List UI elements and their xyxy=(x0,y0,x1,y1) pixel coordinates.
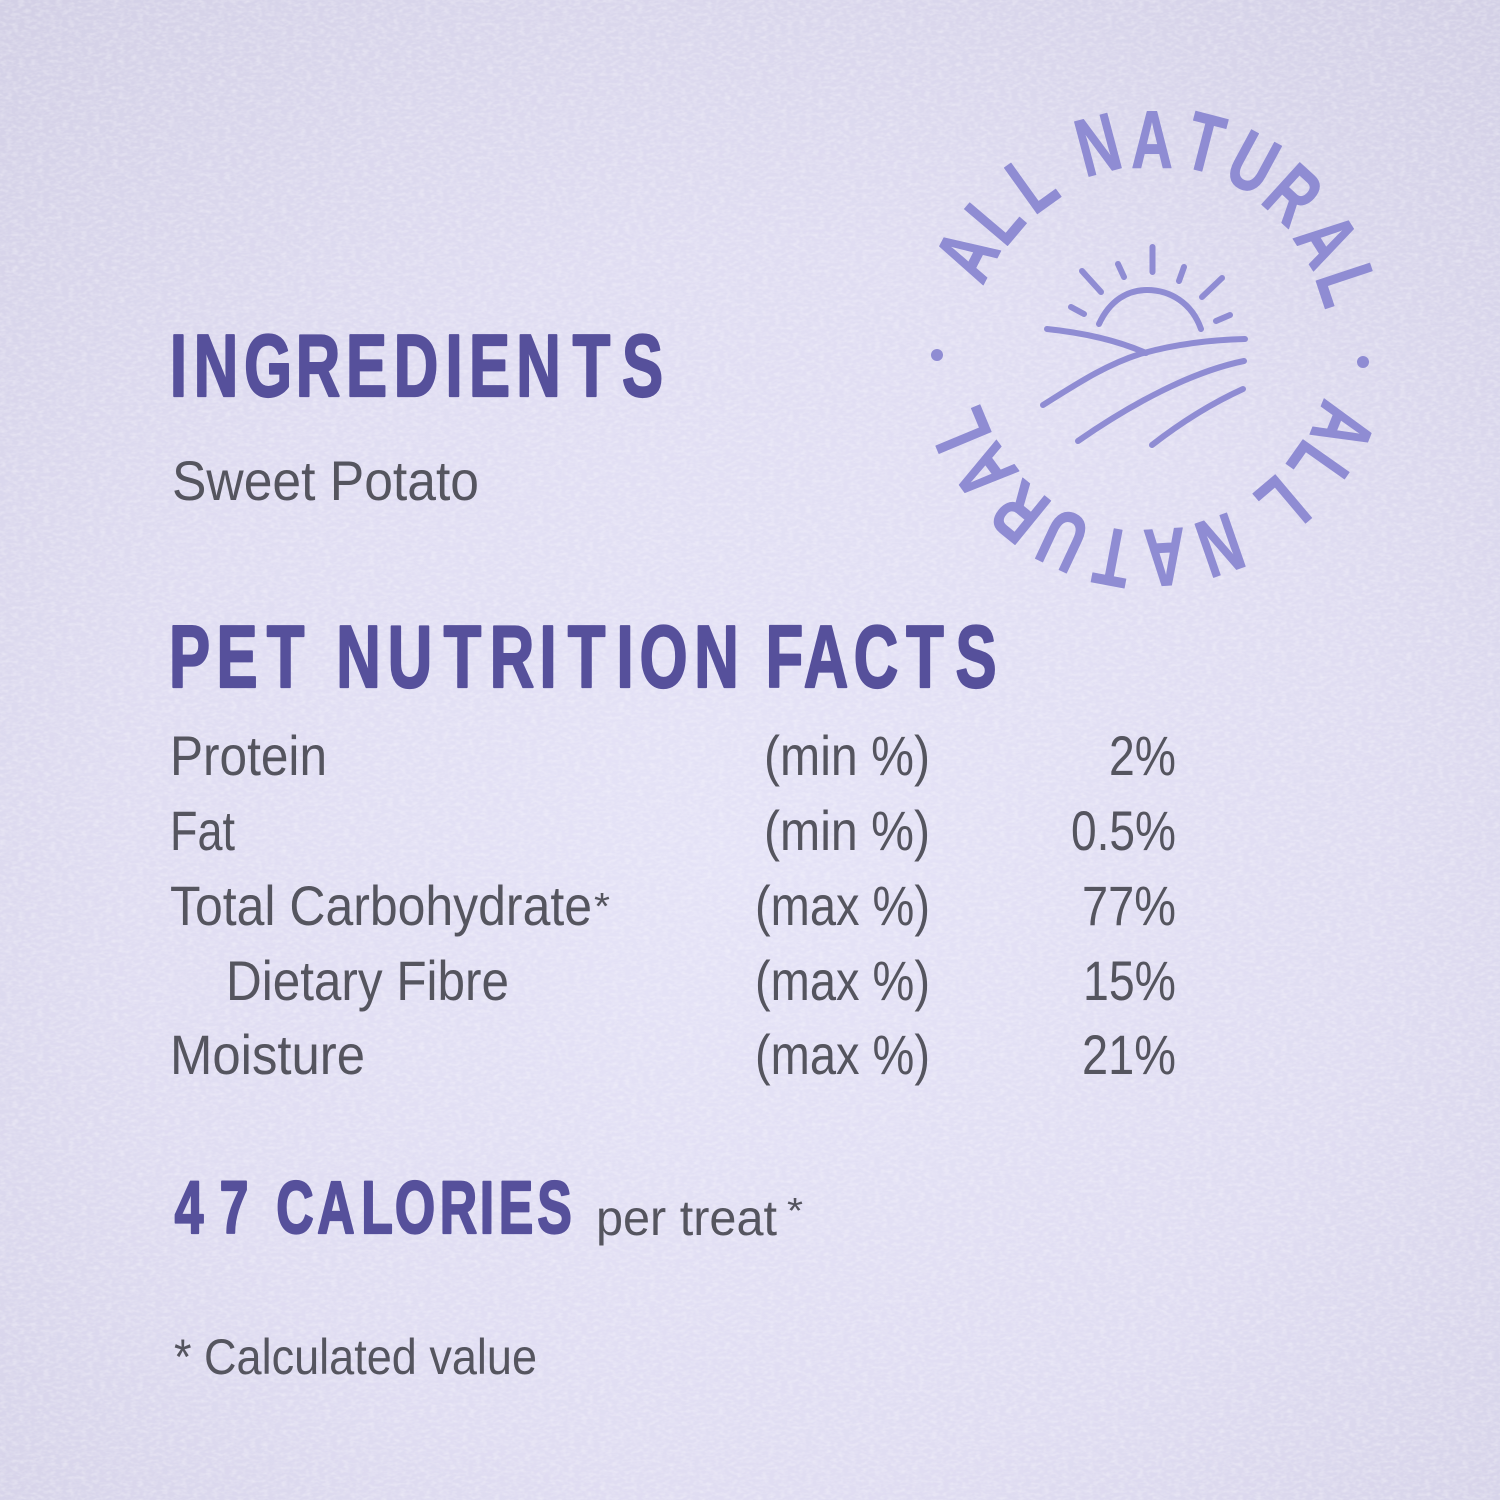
ring text: top arc: L xyxy=(1298,254,1396,316)
heading: ingredients: INGREDIENTS xyxy=(170,317,663,416)
footnote: * Calculated value xyxy=(174,1329,537,1385)
row: dietary fibre: 15% xyxy=(1083,949,1176,1012)
ring separator dots xyxy=(931,349,1369,368)
ring text: bottom arc: R xyxy=(975,464,1065,561)
ring text: bottom arc: T xyxy=(1087,509,1139,606)
row: protein: 2% xyxy=(1109,724,1176,787)
ring text: bottom arc: L xyxy=(1240,459,1326,552)
nutrition table xyxy=(170,724,1176,1086)
row: dietary fibre xyxy=(226,949,1176,1012)
row: dietary fibre: (max %) xyxy=(755,949,930,1012)
row: protein: (min %) xyxy=(764,724,930,787)
ring text: top arc: T xyxy=(1177,94,1233,191)
row: moisture: 21% xyxy=(1082,1023,1176,1086)
heading: pet nutrition facts: PET NUTRITION FACTS xyxy=(169,608,997,707)
ingredient text: Sweet Potato xyxy=(172,449,479,512)
row: dietary fibre: Dietary Fibre xyxy=(226,949,509,1012)
ring text: top arc: U xyxy=(1213,113,1293,213)
row: protein: Protein xyxy=(170,724,327,787)
row: fat: Fat xyxy=(170,799,235,862)
row: total carbohydrate: (max %) xyxy=(755,874,930,937)
row: total carbohydrate xyxy=(170,874,1176,937)
row: total carbohydrate: 77% xyxy=(1082,874,1176,937)
row: fat xyxy=(170,799,1176,862)
per treat note: per treat xyxy=(596,1190,777,1246)
ring text: bottom arc: L xyxy=(1271,427,1366,508)
ring text: bottom arc: U xyxy=(1025,490,1101,591)
ring text: bottom arc xyxy=(911,391,1394,606)
calories heading: 47 CALORIES xyxy=(175,1166,572,1249)
ring text: top arc: R xyxy=(1247,147,1339,243)
row: total carbohydrate: * xyxy=(594,886,610,928)
ring text: top arc: A xyxy=(916,215,1017,294)
row: protein xyxy=(170,724,1176,787)
row: moisture: (max %) xyxy=(755,1023,930,1086)
row: fat: (min %) xyxy=(764,799,930,862)
ring text: top arc: L xyxy=(948,174,1041,260)
ring text: bottom arc: N xyxy=(1186,495,1255,595)
icon: sun rising over fields xyxy=(1043,247,1245,445)
ring text: bottom arc: L xyxy=(911,396,1009,464)
ring text: bottom arc: A xyxy=(1141,510,1189,604)
ring text: bottom arc: A xyxy=(1293,391,1394,463)
ring text: top arc xyxy=(916,94,1396,316)
ring text: top arc: N xyxy=(1066,95,1130,194)
ring text: top arc: A xyxy=(1131,94,1173,185)
badge: all natural xyxy=(911,94,1396,606)
row: moisture xyxy=(170,1023,1176,1086)
row: fat: 0.5% xyxy=(1071,799,1176,862)
ring text: top arc: L xyxy=(991,135,1073,230)
ring text: bottom arc: A xyxy=(936,429,1034,516)
row: moisture: Moisture xyxy=(170,1023,365,1086)
row: total carbohydrate: Total Carbohydrate xyxy=(170,874,592,937)
ring text: top arc: A xyxy=(1278,198,1377,282)
per treat note: * xyxy=(787,1190,803,1231)
